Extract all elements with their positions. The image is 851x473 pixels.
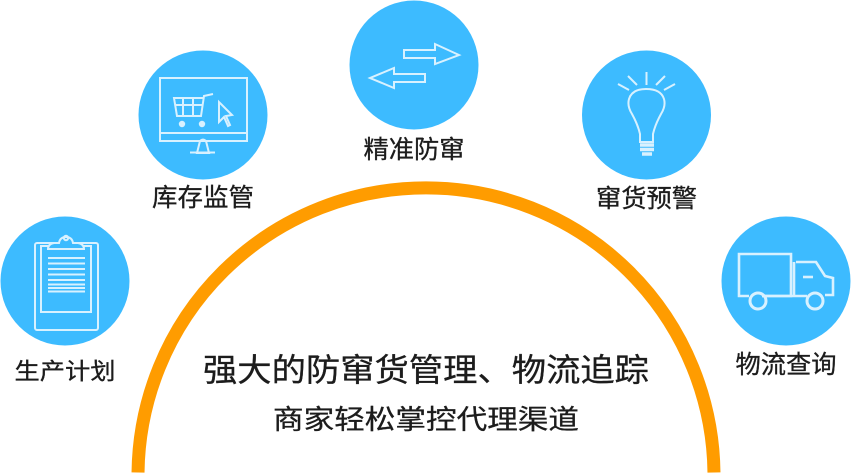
headline: 强大的防窜货管理、物流追踪 — [203, 352, 649, 388]
icon: monitor with cart — [160, 78, 247, 153]
blue circle: diversion warning — [582, 50, 711, 180]
icon: light bulb — [618, 72, 675, 154]
item: inventory monitoring — [138, 50, 268, 212]
item: diversion warning — [582, 50, 711, 213]
subheading: 商家轻松掌控代理渠道 — [273, 405, 579, 435]
label: production planning: 生产计划 — [14, 358, 116, 384]
blue circle: production planning — [0, 216, 130, 346]
blue circle: inventory monitoring — [138, 50, 268, 180]
label: diversion warning: 窜货预警 — [596, 185, 697, 213]
icon: two arrows — [370, 44, 459, 88]
orange semicircle arc — [138, 188, 714, 473]
item: logistics tracking — [722, 216, 850, 379]
icon: truck — [739, 254, 833, 309]
item: production planning — [0, 216, 130, 384]
label: inventory monitoring: 库存监管 — [152, 184, 254, 212]
label: accurate anti-diversion: 精准防窜 — [364, 136, 464, 164]
blue circle: logistics tracking — [722, 216, 850, 346]
blue circle: accurate anti-diversion — [350, 0, 478, 130]
label: logistics tracking: 物流查询 — [736, 351, 836, 379]
icon: clipboard — [35, 236, 98, 330]
item: accurate anti-diversion — [350, 0, 478, 164]
